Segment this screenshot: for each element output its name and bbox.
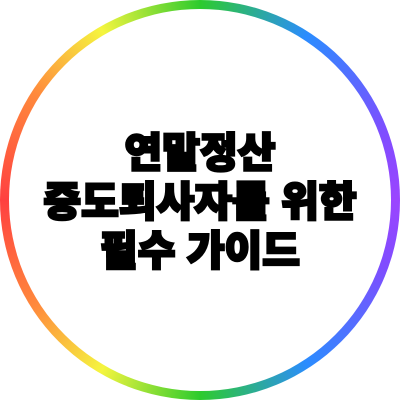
title: 필수 가이드 (100, 228, 300, 274)
title (43, 130, 357, 274)
title: 연말정산 (125, 130, 275, 176)
title: 중도퇴사자를 위한 (43, 179, 357, 225)
